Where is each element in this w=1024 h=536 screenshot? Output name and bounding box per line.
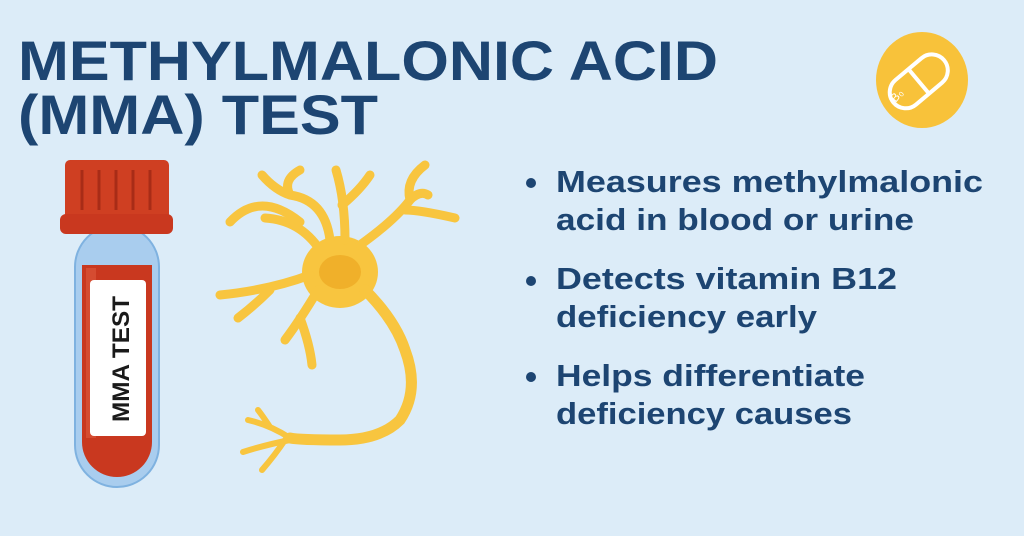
title: (MMA) TEST: [18, 83, 378, 146]
tube label: [90, 280, 146, 436]
bullet 1: Measures methylmalonic: [556, 164, 983, 199]
icon: blood test tube: [60, 160, 173, 487]
bullet 3: [526, 358, 865, 431]
bullet 2: deficiency early: [556, 299, 818, 334]
icon: vitamin pill badge: B₀: [887, 86, 906, 105]
icon: vitamin pill badge: [876, 32, 968, 128]
icon: neuron: [220, 165, 455, 470]
bullet 1: [526, 164, 983, 237]
title: [18, 29, 718, 146]
bullet 3: Helps differentiate: [556, 358, 865, 393]
bullet list: [526, 164, 983, 431]
icon: blood test tube: MMA TEST: [108, 296, 135, 422]
cap: [65, 160, 169, 224]
bullet 1: acid in blood or urine: [556, 202, 914, 237]
title: METHYLMALONIC ACID: [18, 29, 718, 92]
bullet 3: deficiency causes: [556, 396, 852, 431]
bullet 2: Detects vitamin B12: [556, 261, 897, 296]
bullet 2: [526, 261, 897, 334]
